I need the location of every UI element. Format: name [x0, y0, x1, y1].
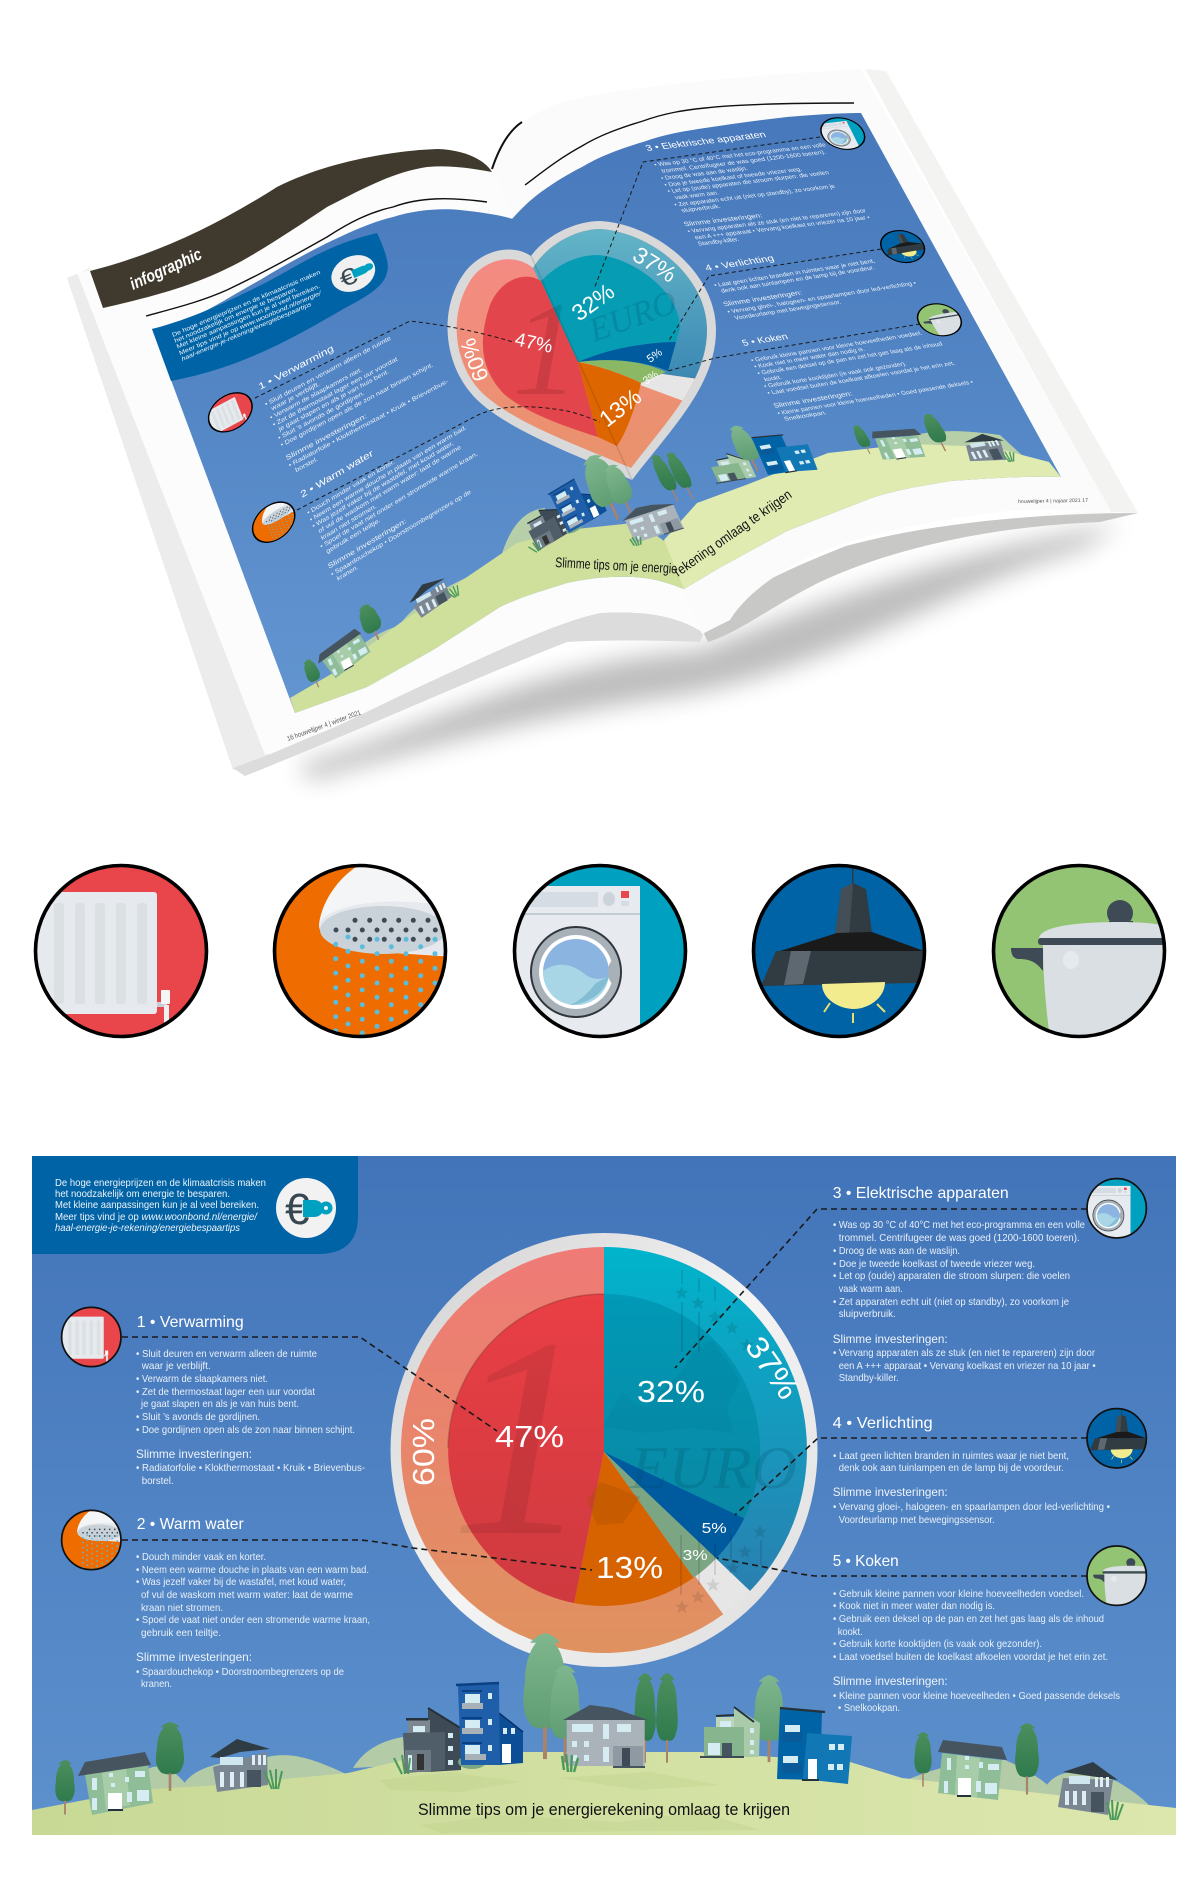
section 1: magazine: je gaat slapen en als je van huis bent. — [277, 367, 390, 433]
section 5: magazine: • Laat voedsel buiten de koelkast afkoelen voordat je het erin zet. — [766, 361, 956, 397]
section 4: Verlichting: • Laat geen lichten branden in ruimtes waar je niet bent, — [833, 1450, 1069, 1462]
coin relief — [448, 1270, 797, 1613]
section 5: Koken: • Gebruik korte kooktijden (is vaak ook gezonder). — [833, 1638, 1042, 1650]
percent labels: magazine: 60% — [455, 335, 494, 385]
footer title: magazine left: Slimme tips om je energie — [555, 554, 678, 576]
house: blue tower — [456, 1683, 523, 1769]
section 1: magazine: borstel. — [294, 455, 319, 474]
neighbourhood scene — [32, 1633, 1176, 1835]
heart-shaped chart — [448, 221, 716, 480]
house: light grey — [562, 1705, 648, 1772]
trees — [55, 1633, 1039, 1815]
section 2: Warm water: kraan niet stromen. — [141, 1602, 223, 1614]
icon: pot small — [1086, 1545, 1149, 1608]
section 2: magazine: kranen. — [336, 563, 359, 582]
inner slice: 32% teal — [604, 1294, 760, 1518]
section 2: magazine: • Was jezelf vaker bij de wastafel, met koud water, — [311, 439, 455, 530]
ground texture — [380, 1772, 760, 1833]
section 1: Verwarming — [60, 1306, 365, 1487]
percent labels — [406, 1330, 806, 1585]
section 1: magazine: • Doe gordijnen open als de zon naar binnen schijnt. — [279, 361, 434, 449]
footer title: magazine right: rekening omlaag te krijgen — [671, 486, 794, 579]
pie chart — [390, 1233, 818, 1667]
section 2: Warm water: kranen. — [141, 1678, 172, 1690]
outer ring: 3% remainder — [604, 1452, 750, 1614]
section 4: magazine: 4 • Verlichting — [704, 254, 776, 273]
section 1: magazine: • Radiatorfolie • Klokthermostaat • Kruik • Brievenbus- — [287, 377, 450, 469]
section 3: Elektrische apparaten: sluipverbruik. — [839, 1308, 896, 1320]
section 5: magazine: Slimme investeringen: — [772, 390, 854, 410]
section 5: magazine: • Gebruik kleine pannen voor kleine hoeveelheden voedsel. — [750, 330, 924, 364]
section 2: Warm water: Slimme investeringen: — [136, 1650, 252, 1664]
section 3: Elektrische apparaten: 3 • Elektrische apparaten — [833, 1185, 1009, 1202]
neighbourhood: magazine — [292, 413, 1018, 691]
section 2: Warm water — [60, 1509, 370, 1690]
section 3: Elektrische apparaten: • Zet apparaten echt uit (niet op standby), zo voorkom je — [833, 1296, 1069, 1308]
section 5: Koken: • Laat voedsel buiten de koelkast afkoelen voordat je het erin zet. — [833, 1651, 1108, 1663]
percent labels: 32% — [637, 1374, 705, 1409]
icon: pot small — [910, 300, 970, 340]
section 1: Verwarming: borstel. — [142, 1475, 174, 1487]
section 3: magazine: Slimme investeringen: — [682, 211, 764, 228]
section 1: Verwarming: 1 • Verwarming — [137, 1314, 244, 1331]
section 5: magazine: • Kleine pannen voor kleine hoeveelheden • Goed passende deksels • — [777, 379, 975, 417]
intro panel — [32, 1156, 358, 1254]
percent labels: 3% — [683, 1547, 708, 1564]
section 4: magazine: • Laat geen lichten branden in ruimtes waar je niet bent, — [713, 258, 877, 289]
section 3: magazine: • Was op 30 °C of 40°C met het eco-programma en een volle — [653, 141, 827, 168]
section 4: magazine: Voordeurlamp met bewegingssensor. — [734, 299, 843, 321]
section 1: Verwarming: • Doe gordijnen open als de zon naar binnen schijnt. — [136, 1424, 355, 1436]
icon: radiator small — [60, 1306, 122, 1368]
section 3: Elektrische apparaten: • Was op 30 °C of 40°C met het eco-programma en een volle — [833, 1219, 1085, 1231]
section 5: magazine: 5 • Koken — [741, 332, 790, 348]
intro text: Met kleine aanpassingen kun je al veel bereiken. — [55, 1199, 259, 1211]
left page — [77, 150, 702, 755]
percent labels: 60% — [406, 1418, 441, 1486]
section 5: magazine: • Gebruik korte kooktijden (is vaak ook gezonder). — [763, 361, 908, 390]
coin relief: EURO — [629, 1435, 797, 1501]
section 2: Warm water: of vul de waskom met warm water: laat de warme — [141, 1589, 353, 1601]
hedges — [335, 431, 1025, 678]
section 5: magazine: • Gebruik een deksel op de pan en zet het gas laag als de inhoud — [757, 341, 944, 377]
section 5: Koken: • Kleine pannen voor kleine hoeveelheden • Goed passende deksels — [833, 1690, 1120, 1702]
inner slice: 13% orange — [574, 1452, 694, 1606]
inner slice: 3% green — [604, 1452, 716, 1578]
section 3: magazine: • Zet apparaten echt uit (niet op standby), zo voorkom je — [673, 184, 837, 208]
section 4: Verlichting: denk ook aan tuinlampen en de lamp bij de voordeur. — [839, 1462, 1064, 1474]
section 2: Warm water: • Neem een warme douche in plaats van een warm bad. — [136, 1564, 369, 1576]
intro text: magazine: De hoge energieprijzen en de klimaatcrisis maken — [171, 269, 321, 339]
icon: euro plug magazine — [326, 248, 381, 299]
section 3: Elektrische apparaten: Standby-killer. — [839, 1372, 899, 1384]
section 3: Elektrische apparaten: • Droog de was aan de waslijn. — [833, 1245, 960, 1257]
icon row — [31, 861, 1174, 1046]
section 3: magazine: • Let op (oude) apparaten die stroom slurpen: die voelen — [666, 170, 831, 195]
section 1: Verwarming: • Sluit ’s avonds de gordijnen. — [136, 1411, 260, 1423]
folio: page 16: 16 houwelijper 4 | winter 2021 — [286, 710, 362, 743]
percent labels: 37% — [738, 1330, 806, 1406]
section 2: magazine: gebruik een teiltje. — [325, 516, 381, 555]
black rule lines — [146, 103, 854, 316]
heart-shaped chart: 1 — [512, 275, 580, 424]
section 2: Warm water: 2 • Warm water — [137, 1516, 244, 1533]
right page — [492, 69, 1111, 634]
section 3: magazine: vaak warm aan. — [674, 190, 720, 201]
percent labels: 5% — [702, 1520, 727, 1537]
section 3: Elektrische apparaten: trommel. Centrifugeer de was goed (1200-1600 toeren). — [839, 1232, 1080, 1244]
intro text: Meer tips vind je op www.woonbond.nl/energie/ — [55, 1211, 258, 1223]
section 1: magazine: Slimme investeringen: — [285, 412, 368, 462]
section 4: magazine: Slimme investeringen: — [722, 289, 804, 308]
page stack left and bottom — [67, 69, 1138, 776]
section 2: magazine: kraan niet stromen. — [320, 502, 378, 542]
section 5: Koken: • Snelkookpan. — [838, 1702, 900, 1714]
section 1: magazine — [202, 294, 452, 504]
section 1: Verwarming: • Zet de thermostaat lager een uur voordat — [136, 1386, 315, 1398]
section 5: magazine: Snelkookpan. — [783, 410, 828, 422]
flat infographic panel — [32, 1156, 1176, 1835]
house: green right — [938, 1740, 1007, 1800]
icon: euro plug — [276, 1178, 336, 1238]
section 2: magazine: • Douch minder vaak en korter. — [306, 457, 396, 516]
section 5: Koken: 5 • Koken — [833, 1553, 899, 1570]
percent labels: magazine: 37% — [628, 241, 681, 288]
blue pages — [152, 113, 1061, 713]
house: green left — [78, 1752, 153, 1815]
icon: euro plug magazine: € — [336, 262, 361, 293]
icon: shower small — [60, 1509, 124, 1571]
percent labels: magazine: 47% — [513, 329, 555, 358]
section 2: magazine: • Spoel de vaat niet onder een stromende warme kraan, — [319, 450, 478, 550]
section 4: Verlichting — [833, 1407, 1148, 1526]
section 1: Verwarming: je gaat slapen en als je van huis bent. — [140, 1398, 299, 1410]
section 1: Verwarming: • Sluit deuren en verwarm alleen de ruimte — [136, 1348, 317, 1360]
house: grey left — [210, 1739, 282, 1792]
intro text: het noodzakelijk om energie te besparen. — [55, 1188, 230, 1200]
percent labels: 47% — [495, 1419, 564, 1454]
section 3: Elektrische apparaten: • Doe je tweede koelkast of tweede vriezer weg. — [833, 1258, 1035, 1270]
section 1: magazine: 1 • Verwarming — [257, 343, 335, 392]
section 4: magazine: denk ook aan tuinlampen en de lamp bij de voordeur. — [720, 265, 876, 294]
intro text: haal-energie-je-rekening/energiebespaartips — [55, 1222, 241, 1234]
section 3: magazine: trommel. Centrifugeer de was goed (1200-1600 toeren). — [660, 149, 827, 174]
house: dark modern — [394, 1708, 462, 1774]
icon: washer small — [1086, 1177, 1148, 1241]
intro text — [55, 1177, 266, 1234]
icon: euro plug: € — [285, 1185, 309, 1234]
section 2: Warm water: • Douch minder vaak en korter. — [136, 1551, 266, 1563]
magazine mockup — [67, 69, 1138, 780]
section 2: magazine: Slimme investeringen: — [327, 517, 407, 570]
intro text: magazine: Met kleine aanpassingen kun je al veel bereiken. — [176, 283, 321, 350]
icon: lamp small — [873, 227, 932, 266]
section 5: magazine: kookt. — [763, 375, 783, 383]
ground: left page — [290, 523, 684, 713]
section 1: magazine: • Verwarm de slaapkamers niet. — [269, 365, 363, 421]
intro text: De hoge energieprijzen en de klimaatcrisis maken — [55, 1177, 266, 1189]
band: infographic header — [90, 149, 492, 308]
icon: shower small — [246, 492, 302, 551]
outer ring: 60% — [401, 1247, 723, 1653]
ground: right page — [664, 444, 1061, 589]
percent labels: 13% — [596, 1550, 663, 1585]
section 2: magazine: 2 • Warm water — [299, 448, 375, 500]
intro text: magazine: het noodzakelijk om energie te besparen. — [173, 286, 298, 344]
section 1: magazine: waar je verblijft. — [269, 380, 321, 413]
percent labels: magazine: 5% — [645, 346, 665, 365]
section 3: Elektrische apparaten: een A +++ apparaat • Vervang koelkast en vriezer na 10 jaar • — [839, 1360, 1096, 1372]
dashed leader lines: magazine — [255, 137, 920, 510]
section 2: magazine: of vul de waskom met warm water: laat de warme — [317, 443, 462, 535]
section 4: magazine — [701, 227, 947, 322]
section 2: Warm water: • Was jezelf vaker bij de wastafel, met koud water, — [136, 1576, 346, 1588]
section 3: magazine: • Vervang apparaten als ze stuk (en niet te repareren) zijn door — [687, 208, 868, 235]
section 3: Elektrische apparaten: • Vervang apparaten als ze stuk (en niet te repareren) zijn door — [833, 1347, 1095, 1359]
section 5: Koken — [833, 1545, 1149, 1714]
house: grey right — [1058, 1762, 1123, 1820]
section 3: magazine: sluipverbruik. — [680, 204, 722, 214]
icon: washing machine — [510, 861, 690, 1046]
percent labels: magazine — [455, 241, 681, 432]
section 4: Verlichting: Slimme investeringen: — [833, 1485, 948, 1499]
section 2: Warm water: • Spaardouchekop • Doorstroombegrenzers op de — [136, 1666, 344, 1678]
section 1: Verwarming: • Verwarm de slaapkamers niet. — [136, 1373, 268, 1385]
icon: lamp small — [1086, 1407, 1148, 1469]
section 2: magazine — [246, 394, 492, 615]
section 3: magazine — [642, 115, 910, 248]
section 3: magazine: • Droog de was aan de waslijn. — [660, 166, 749, 182]
section 2: magazine: • Spaardouchekop • Doorstroombegrenzers op de — [330, 488, 472, 578]
icon: radiator small — [202, 384, 258, 440]
intro text: magazine: haal-energie-je-rekening/energiebespaartips — [180, 301, 313, 363]
section 5: Koken: kookt. — [838, 1626, 863, 1638]
icon: cooking pot — [989, 861, 1174, 1046]
section 3: Elektrische apparaten: vaak warm aan. — [839, 1283, 903, 1295]
folio: page 17: houwelijper 4 | najaar 2021 17 — [1018, 498, 1088, 505]
intro text: magazine: Meer tips vind je op www.woonbond.nl/energie/ — [178, 289, 323, 357]
house: blue modern — [777, 1708, 852, 1784]
percent labels: magazine: 13% — [594, 383, 646, 432]
inner slice: 47% red — [448, 1294, 604, 1603]
section 5: Koken: Slimme investeringen: — [833, 1674, 948, 1688]
hedges — [70, 1737, 1157, 1815]
section 3: magazine: 3 • Elektrische apparaten — [644, 130, 768, 153]
section 5: Koken: • Gebruik een deksel op de pan en zet het gas laag als de inhoud — [833, 1613, 1104, 1625]
icon: washer small — [814, 115, 872, 153]
section 3: magazine: Standby-killer. — [697, 237, 741, 247]
intro panel: magazine — [152, 233, 388, 381]
section 3: Elektrische apparaten: • Let op (oude) apparaten die stroom slurpen: die voelen — [833, 1270, 1070, 1282]
section 3: magazine: een A +++ apparaat • Vervang koelkast en vriezer na 10 jaar • — [694, 215, 872, 241]
section 4: Verlichting: 4 • Verlichting — [833, 1415, 933, 1432]
section 3: magazine: • Doe je tweede koelkast of tweede vriezer weg. — [663, 167, 804, 188]
section 4: Verlichting: Voordeurlamp met bewegingssensor. — [839, 1514, 995, 1526]
footer title: Slimme tips om je energierekening omlaag te krijgen — [418, 1800, 790, 1819]
heart-shaped chart: EURO — [583, 284, 682, 350]
icon: radiator — [31, 861, 211, 1041]
icon: lamp — [749, 861, 929, 1041]
section 1: Verwarming: Slimme investeringen: — [136, 1447, 252, 1461]
percent labels: magazine: 3% — [641, 368, 661, 387]
section 2: magazine: • Neem een warme douche in plaats van een warm bad. — [309, 423, 467, 523]
percent labels: magazine: 32% — [567, 278, 619, 326]
section 1: magazine: • Sluit ’s avonds de gordijnen. — [277, 389, 366, 442]
section 5: Koken: • Gebruik kleine pannen voor kleine hoeveelheden voedsel. — [833, 1588, 1084, 1600]
section 1: magazine: • Sluit deuren en verwarm alleen de ruimte — [264, 334, 392, 408]
dashed leader lines — [122, 1209, 1087, 1576]
section 1: Verwarming: • Radiatorfolie • Klokthermostaat • Kruik • Brievenbus- — [136, 1462, 365, 1474]
section 5: magazine: • Kook niet in meer water dan nodig is. — [753, 346, 866, 370]
ground — [32, 1752, 1176, 1835]
coin relief: 1 — [450, 1279, 592, 1595]
inner slice: 5% blue — [604, 1452, 744, 1558]
icon: shower — [270, 861, 455, 1041]
section 5: Koken: • Kook niet in meer water dan nodig is. — [833, 1600, 995, 1612]
heading: infographic: infographic — [127, 244, 205, 294]
house: green modern — [700, 1707, 760, 1758]
section 3: Elektrische apparaten: Slimme investeringen: — [833, 1332, 948, 1346]
section 2: Warm water: • Spoel de vaat niet onder een stromende warme kraan, — [136, 1614, 370, 1626]
section 5: magazine — [738, 300, 998, 423]
section 1: magazine: • Zet de thermostaat lager een uur voordat — [272, 355, 398, 428]
magazine drop shadow — [300, 525, 1120, 780]
section 1: Verwarming: waar je verblijft. — [141, 1360, 211, 1372]
outer ring: 37% — [604, 1247, 807, 1591]
section 2: Warm water: gebruik een teiltje. — [141, 1627, 221, 1639]
section 3: Elektrische apparaten — [833, 1177, 1148, 1384]
section 4: Verlichting: • Vervang gloei-, halogeen- en spaarlampen door led-verlichting • — [833, 1501, 1110, 1513]
section 4: magazine: • Vervang gloei-, halogeen- en spaarlampen door led-verlichting • — [726, 280, 918, 315]
